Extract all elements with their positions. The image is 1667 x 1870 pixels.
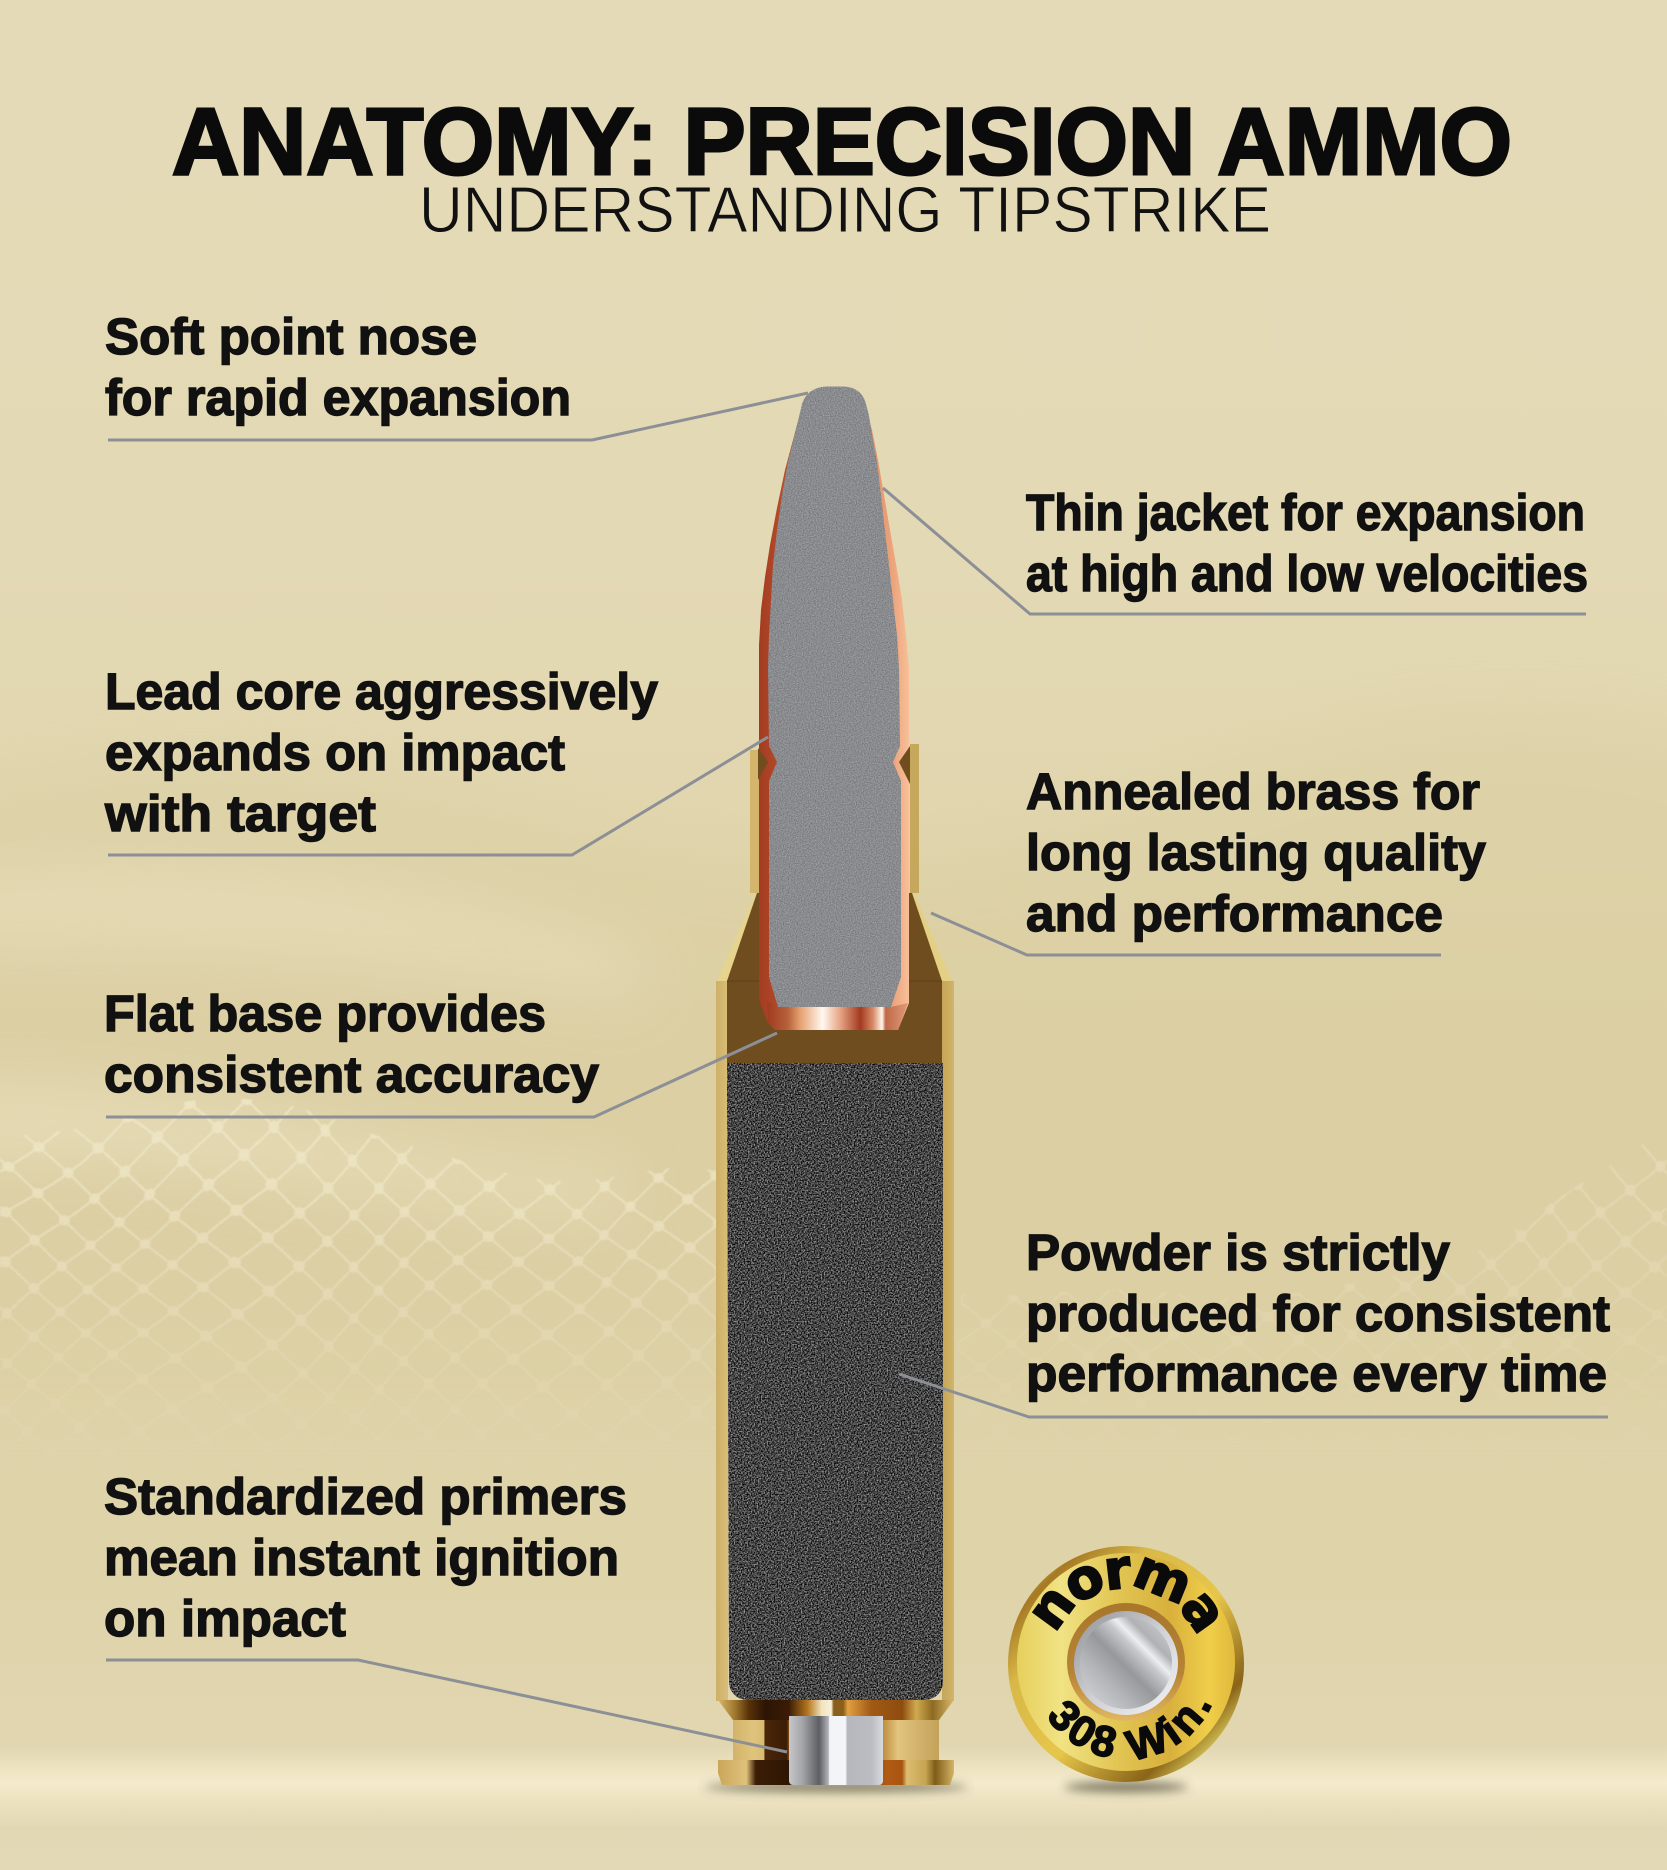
callout: flat base: consistent accuracy [104, 1046, 600, 1103]
brass case [716, 744, 954, 1785]
title: ANATOMY: PRECISION AMMO [172, 89, 1512, 195]
callout: primers: mean instant ignition [104, 1529, 619, 1586]
callout: powder: Powder is strictly [1026, 1224, 1451, 1281]
callout: powder: performance every time [1026, 1345, 1607, 1402]
callout: primers [104, 1468, 787, 1752]
callout: powder [899, 1224, 1610, 1417]
callout: flat base: Flat base provides [104, 985, 546, 1042]
callout: annealed brass: long lasting quality [1026, 824, 1487, 881]
bullet jacket [758, 415, 910, 1030]
callout: primers: Standardized primers [104, 1468, 627, 1525]
subtitle: UNDERSTANDING TIPSTRIKE [419, 173, 1271, 246]
callout: lead core: Lead core aggressively [105, 663, 659, 720]
callout: lead core [104, 663, 768, 855]
primer face [1080, 1617, 1172, 1709]
primer pocket ring [1067, 1603, 1185, 1721]
callout: lead core: with target [104, 785, 376, 842]
callout: soft point nose: for rapid expansion [105, 369, 571, 426]
headstamp [1008, 1546, 1244, 1782]
callout: thin jacket: Thin jacket for expansion [1026, 484, 1585, 541]
background [0, 388, 1667, 1808]
callout: annealed brass: and performance [1026, 885, 1443, 942]
lead core [768, 386, 901, 1007]
callout: lead core: expands on impact [105, 724, 565, 781]
callout: thin jacket: at high and low velocities [1026, 545, 1588, 602]
callout: primers: on impact [104, 1590, 346, 1647]
callout: soft point nose: Soft point nose [105, 308, 477, 365]
caliber text: 308 Win. [1048, 1700, 1212, 1760]
callout: powder: produced for consistent [1026, 1285, 1610, 1342]
brand text: norma [1032, 1556, 1218, 1634]
callout: annealed brass: Annealed brass for [1026, 763, 1480, 820]
shadows under cartridge and headstamp [704, 1782, 1188, 1792]
callout: flat base [104, 985, 777, 1117]
primer [789, 1716, 883, 1785]
powder [727, 1063, 943, 1700]
callout: thin jacket [883, 484, 1588, 614]
callout: soft point nose [105, 308, 808, 440]
cartridge cross-section [716, 386, 954, 1785]
callout: annealed brass [931, 763, 1487, 955]
